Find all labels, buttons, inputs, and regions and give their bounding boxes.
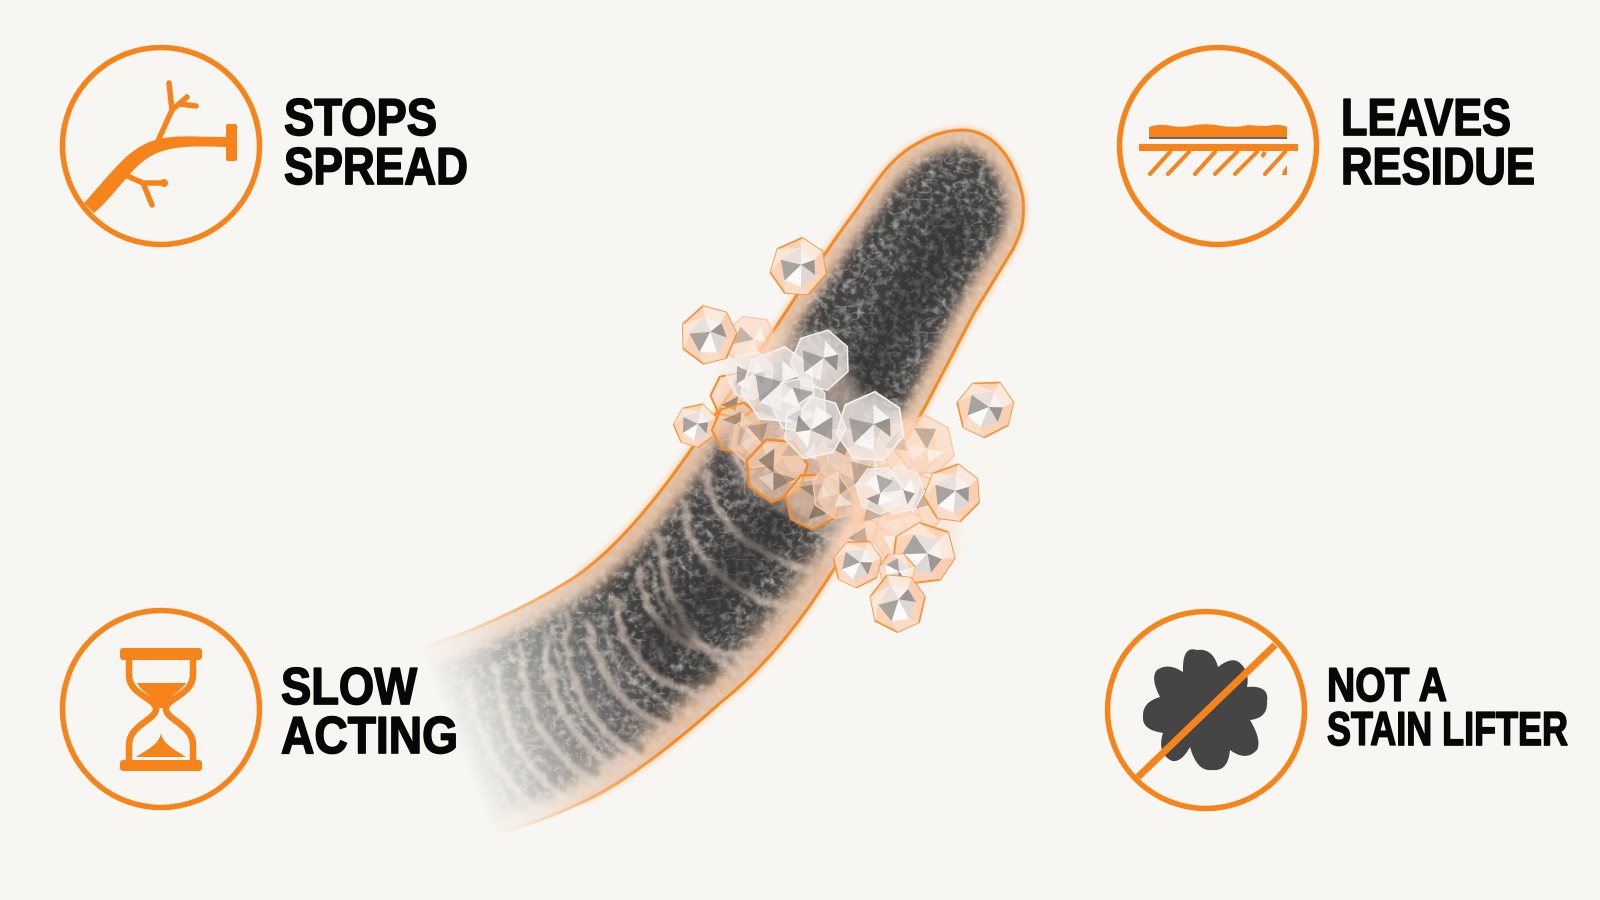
label: stops spread: STOPS bbox=[284, 89, 437, 147]
label: slow acting: ACTING bbox=[281, 707, 458, 765]
crystal cluster bbox=[669, 305, 986, 600]
label: stops spread: SPREAD bbox=[284, 138, 468, 196]
label: stops spread bbox=[284, 89, 468, 196]
panel: not a stain lifter bbox=[1108, 612, 1568, 808]
bacterium body bbox=[426, 128, 1025, 833]
label: leaves residue bbox=[1341, 89, 1535, 196]
label: not a stain lifter bbox=[1327, 658, 1568, 755]
panel: leaves residue bbox=[1120, 48, 1535, 244]
label: leaves residue: RESIDUE bbox=[1341, 138, 1535, 196]
icon: branching line stopped by a bar bbox=[62, 48, 260, 244]
central illustration: bacterium with crystals bbox=[426, 124, 1030, 833]
label: slow acting: SLOW bbox=[281, 658, 418, 716]
icon: hourglass bbox=[62, 610, 260, 808]
icon: residue layer on a surface bbox=[1120, 48, 1316, 244]
panel: slow acting bbox=[62, 610, 458, 808]
icon: crossed-out stain bbox=[1108, 612, 1304, 808]
orange glow around bacterium bbox=[578, 130, 1023, 804]
label: leaves residue: LEAVES bbox=[1341, 89, 1511, 147]
panel: stops spread bbox=[62, 48, 468, 244]
label: not a stain lifter: NOT A bbox=[1327, 658, 1447, 711]
orange outline bbox=[420, 130, 1023, 832]
label: slow acting bbox=[281, 658, 458, 765]
isolated crystals bbox=[677, 234, 1024, 638]
